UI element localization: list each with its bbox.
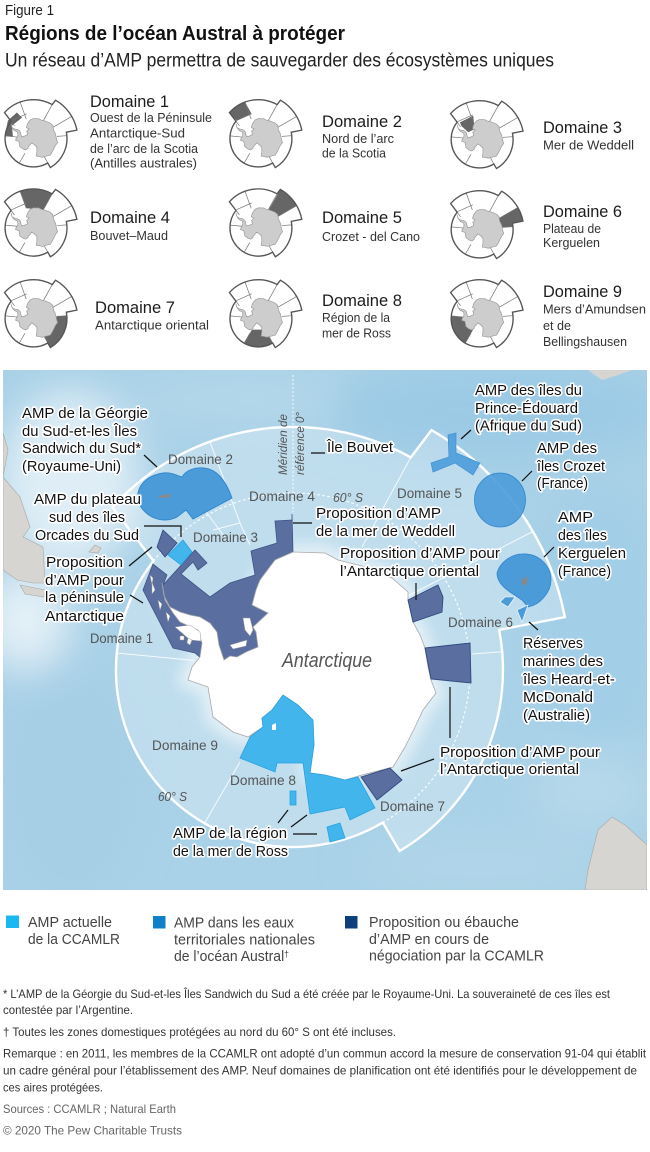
MPA: Kerguelen [497,554,551,607]
domain 7 locator [4,280,209,348]
MPA: Crozet [474,473,526,527]
label: Crozet: (France) [537,475,588,492]
legend item: national waters MPA: † [284,949,289,959]
legend item: current CCAMLR MPA [6,915,120,948]
label: East Antarctica proposal, north: Proposition d’AMP pour [340,545,500,562]
land: South America [3,433,101,597]
note: ces aires protégées. [3,1080,103,1094]
text: domain 1 [90,92,212,170]
text: domain 2: de la Scotia [322,146,387,160]
label: Kerguelen: des îles [558,527,607,544]
text: domain 7 [95,298,209,332]
text: domain 1: de l’arc de la Scotia [90,141,199,156]
domain labels: Domaine 1 [90,631,153,646]
icon: domain 1 [4,100,77,168]
title: Régions de l’océan Austral à protéger [5,22,345,45]
text: domain 4 [90,208,170,243]
domain 6 locator [451,191,622,259]
domain labels: Domaine 7 [380,799,445,814]
text: domain 9: et de [543,318,571,333]
label: East Antarctica proposal, south: l’Antarctique oriental [440,761,579,778]
domain 3 locator [451,101,634,169]
text: domain 4: Domaine 4 [90,208,170,227]
legend item: proposed MPA [345,915,544,964]
icon: domain 9 [451,280,523,348]
prime meridian label: référence 0° [293,412,307,475]
label: Peninsula proposal: Antarctique [45,608,124,625]
latitude labels [158,490,363,804]
note: un cadre général pour l’établissement des AMP. Neuf domaines de planification ont été identifiés pour le développement de [3,1064,637,1078]
reserves: Heard and McDonald [500,597,528,622]
MPA: Prince Edward Islands [431,433,480,475]
label: East Antarctica proposal, north: l’Antarctique oriental [340,563,479,580]
panel: map of the Southern Ocean [0,360,650,900]
label: Crozet: AMP des [537,440,597,457]
text: domain 6 [543,202,622,250]
legend item: proposed MPA: négociation par la CCAMLR [369,948,544,964]
label: Ross Sea: AMP de la région [173,825,287,842]
text: domain 2 [322,112,402,160]
MPA: South Orkney plateau [168,540,192,565]
label: Kerguelen: (France) [558,563,611,580]
label: South Orkney MPA [34,491,141,544]
legend item: national waters MPA: de l’océan Austral [174,949,288,965]
text: domain 1: Antarctique-Sud [90,126,185,140]
island: Kerguelen [521,576,527,586]
note: Remarque : en 2011, les membres de la CCAMLR ont adopté d’un commun accord la mesure de conservation 91-04 qui établit [3,1046,647,1060]
domain lines [117,375,533,823]
label: Heard and McDonald: îles Heard-et- [522,671,615,688]
domain labels: Domaine 4 [249,489,315,504]
text: domain 5: Crozet - del Cano [322,229,420,244]
text: domain 3 [543,118,634,152]
label: South Georgia MPA: (Royaume-Uni) [22,458,121,475]
label: Weddell proposal: Proposition d’AMP [316,505,441,522]
footnote: asterisk: contestée par l’Argentine. [3,1003,133,1017]
latitude labels: 60° S [158,789,187,804]
legend item: proposed MPA: d’AMP en cours de [369,932,489,948]
text: domain 9: Bellingshausen [543,334,627,349]
land: Africa [588,370,632,380]
label: Prince Edward: AMP des îles du [475,382,582,399]
land: Tasmania and New Zealand [585,817,647,890]
label: Weddell proposal [316,505,455,540]
MPA: Ross Sea region [240,695,375,842]
text: domain 9: Mers d’Amundsen [543,302,646,316]
label: Peninsula proposal: Proposition [46,554,123,571]
note [3,1046,647,1094]
proposed MPA: East Antarctica (three blocks) [361,585,471,800]
domain labels: Domaine 3 [193,530,258,545]
legend item: current CCAMLR MPA: de la CCAMLR [28,932,120,948]
text: domain 6: Domaine 6 [543,202,622,221]
domain 9 locator [451,280,646,349]
MPA: South Orkney dark block [157,530,177,557]
label: Peninsula proposal: la péninsule [45,589,124,606]
shelf glow [162,552,436,780]
MPA: South Georgia [138,468,232,520]
latitude labels: 60° S [333,490,363,505]
label: Crozet [536,440,606,492]
domain 8 locator [229,280,402,348]
callout lines [129,430,554,834]
panel: domain key [4,92,646,349]
label: Ross Sea [173,825,288,860]
label: South Orkney MPA: sud des îles [49,509,125,526]
icon: domain 6 [451,191,523,259]
legend item: national waters MPA: territoriales nationales [174,932,315,948]
label: South Georgia MPA: Sandwich du Sud* [22,440,141,457]
prime meridian label: Méridien de [276,414,290,475]
text: domain 8: Région de la [322,310,391,325]
text: domain 8: mer de Ross [322,326,391,340]
label: Kerguelen: Kerguelen [558,545,626,562]
domain 4 locator [4,189,170,257]
domain labels [90,452,513,814]
label: East Antarctica proposal, south: Proposition d’AMP pour [440,744,600,761]
proposed MPAs: Weddell Sea and Antarctic Peninsula [143,514,293,664]
Antarctica [162,552,436,780]
label: Peninsula proposal: d’AMP pour [45,572,124,589]
icon: domain 5 [229,189,302,257]
label: South Orkney MPA: AMP du plateau [34,491,141,508]
text: domain 3: Domaine 3 [543,118,622,137]
label: Kerguelen: AMP [558,509,593,526]
text: domain 5: Domaine 5 [322,208,402,227]
ocean ring inside planning domains [112,427,565,851]
domain 5 locator [229,189,420,257]
text: domain 7: Antarctique oriental [95,318,209,332]
copyright: © 2020 The Pew Charitable Trusts [3,1124,182,1138]
domain 2 locator [229,100,402,168]
text: domain 1: Ouest de la Péninsule [90,110,212,125]
text: domain 9: Domaine 9 [543,282,622,301]
text: domain 4: Bouvet–Maud [90,228,168,243]
label: South Georgia MPA [22,405,148,475]
text: domain 6: Plateau de [543,221,601,236]
island: South Georgia [158,494,171,498]
footnote: asterisk: * L’AMP de la Géorgie du Sud-et-les Îles Sandwich du Sud a été créée par le Royaume-Uni. La souveraineté de ces îles est [3,987,611,1001]
label: Heard and McDonald: marines des [523,653,603,670]
icon: domain 4 [4,189,77,257]
domain labels: Domaine 5 [397,486,462,501]
label: Prince Edward: (Afrique du Sud) [475,418,582,434]
text: domain 8: Domaine 8 [322,291,402,310]
label: Ross Sea: de la mer de Ross [173,843,288,860]
legend item: current CCAMLR MPA: AMP actuelle [28,915,112,931]
label: Heard and McDonald: Réserves [523,635,583,652]
domain 1 locator [4,92,212,170]
text: domain 2: Domaine 2 [322,112,402,131]
label: South Georgia MPA: du Sud-et-les Îles [22,423,137,440]
legend [6,915,544,965]
label: Kerguelen [558,509,626,580]
text: domain 3: Mer de Weddell [543,138,634,152]
icon: domain 7 [4,280,77,348]
domain labels: Domaine 9 [152,738,218,753]
icon: domain 3 [451,101,523,169]
islands and ice rises [150,575,253,649]
text: domain 1: (Antilles australes) [90,156,197,170]
domain outer boundary [112,427,565,851]
footnote: asterisk [3,987,611,1017]
legend item: national waters MPA: AMP dans les eaux [174,916,295,932]
text: domain 2: Nord de l’arc [322,131,394,146]
label: Heard and McDonald [522,635,615,724]
label: Crozet: îles Crozet [536,458,606,475]
text: domain 1: Domaine 1 [90,92,169,111]
label: East Antarctica proposal, north [340,545,500,580]
legend item: proposed MPA: Proposition ou ébauche [369,915,519,931]
icon: domain 8 [229,280,302,348]
domain labels: Domaine 2 [168,452,233,467]
prime meridian label [278,412,304,475]
label: South Georgia MPA: AMP de la Géorgie [22,405,148,422]
subtitle: Un réseau d’AMP permettra de sauvegarder des écosystèmes uniques [5,50,554,72]
label: Heard and McDonald: McDonald [523,689,593,706]
domain labels: Domaine 6 [448,615,513,630]
icon: domain 2 [229,100,302,168]
label: Antarctique: Antarctique [281,650,372,672]
footnote: dagger: † Toutes les zones domestiques protégées au nord du 60° S ont été incluses. [3,1025,396,1039]
label: East Antarctica proposal, south [440,744,600,778]
text: domain 7: Domaine 7 [95,298,175,317]
legend item: national waters MPA [153,916,315,965]
label: Heard and McDonald: (Australie) [523,707,590,724]
sources: Sources : CCAMLR ; Natural Earth [3,1102,176,1116]
label: Weddell proposal: de la mer de Weddell [316,523,455,540]
text: domain 9 [543,282,646,349]
figure number: Figure 1 [5,2,54,19]
label: South Orkney MPA: Orcades du Sud [35,527,139,544]
text: domain 5 [322,208,420,244]
label: Prince Edward: Prince-Édouard [475,400,578,417]
text: domain 6: Kerguelen [543,235,600,250]
label: Peninsula proposal [45,554,124,625]
domain labels: Domaine 8 [230,773,296,788]
text: domain 8 [322,291,402,340]
label: Bouvet: Île Bouvet [326,439,394,456]
label: Prince Edward [475,382,582,434]
